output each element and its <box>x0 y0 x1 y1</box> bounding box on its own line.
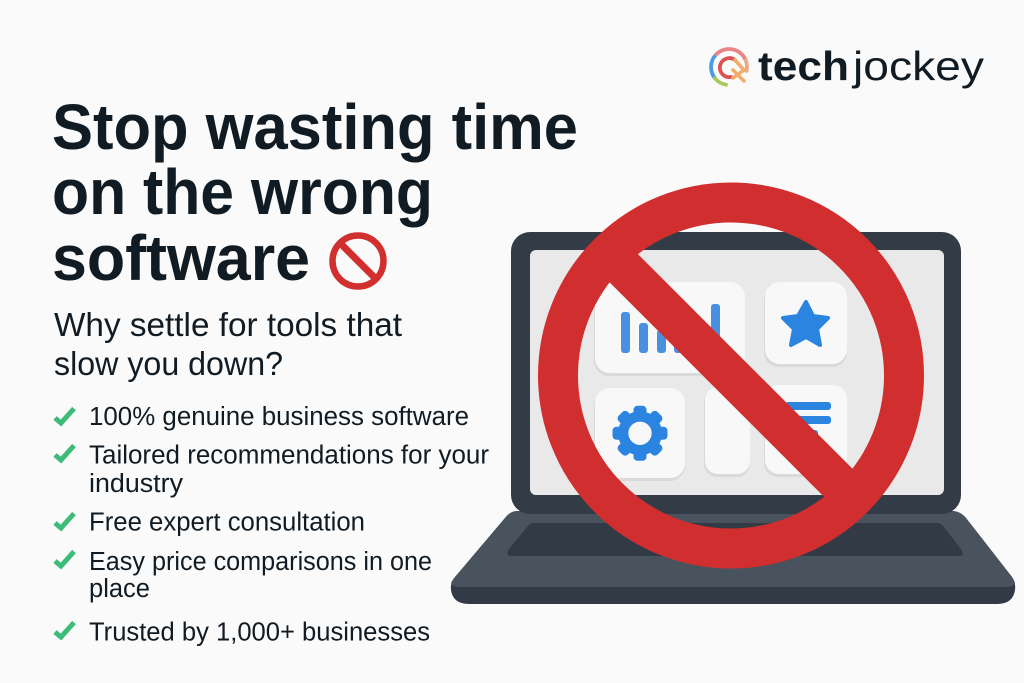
laptop base <box>451 511 1015 604</box>
list item: trusted: Trusted by 1,000+ businesses <box>89 618 430 646</box>
list item: free consultation: Free expert consultation <box>89 508 365 536</box>
prohibition sign over laptop <box>558 202 904 548</box>
subheading <box>54 306 402 382</box>
list item: price comparisons: place <box>89 575 150 603</box>
list item: tailored recommendations: industry <box>89 470 183 498</box>
heading: on the wrong <box>52 156 433 228</box>
heading: software <box>52 222 310 294</box>
list item: genuine software: 100% genuine business software <box>89 403 469 431</box>
app card: gear <box>594 388 685 481</box>
app card: star <box>764 282 847 367</box>
icon: star <box>783 302 828 345</box>
laptop screen <box>530 250 944 495</box>
list item: tailored recommendations <box>55 442 490 498</box>
heading: Stop wasting time <box>52 91 578 163</box>
list item: price comparisons <box>55 548 432 603</box>
app card: bar chart <box>594 282 745 376</box>
heading <box>52 91 578 294</box>
icon: prohibited sign in heading <box>332 236 384 286</box>
laptop illustration <box>451 232 1015 604</box>
logo: techjockey <box>711 43 985 89</box>
subheading: Why settle for tools that <box>54 306 402 343</box>
subheading: slow you down? <box>54 345 283 382</box>
keyboard <box>507 523 963 556</box>
app card: text lines <box>764 385 847 477</box>
list item: tailored recommendations: Tailored recommendations for your <box>89 442 490 470</box>
benefits list <box>55 403 490 646</box>
laptop lid <box>511 232 961 514</box>
list item: price comparisons: Easy price comparisons in one <box>89 548 432 576</box>
icon: text lines <box>785 402 831 438</box>
logo wordmark: tech <box>758 43 849 89</box>
bar chart <box>621 304 720 353</box>
icon: logo rings <box>711 49 747 85</box>
icon: gear <box>612 406 668 461</box>
app card: blank <box>704 387 750 477</box>
logo: techjockey: jockey <box>852 43 985 89</box>
